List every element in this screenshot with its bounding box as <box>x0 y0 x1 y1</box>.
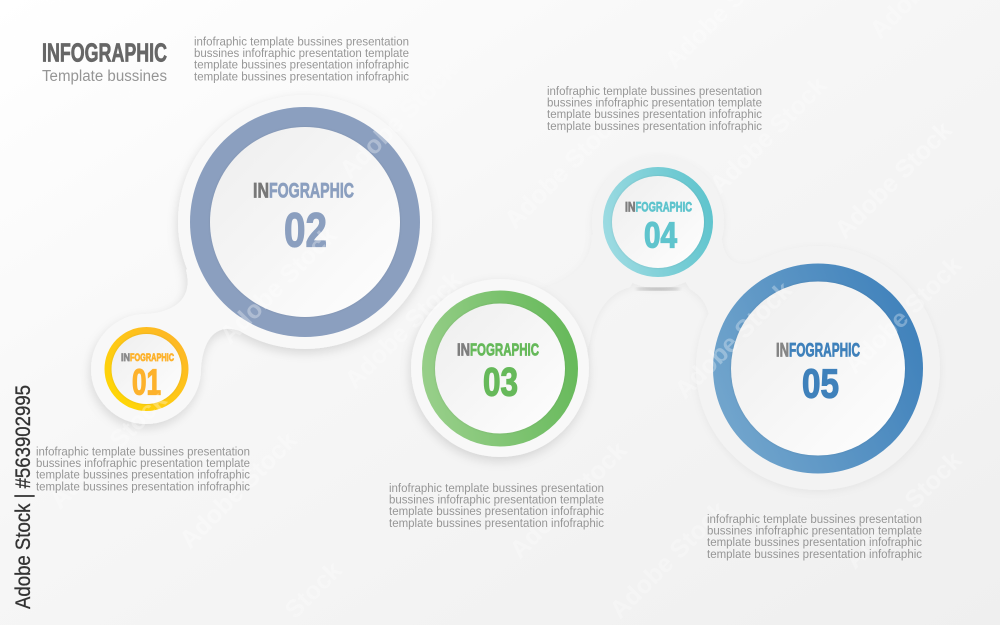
circle 02: IN <box>253 178 269 202</box>
watermark pattern: Adobe Stock <box>829 116 957 244</box>
title: INFOGRAPHIC <box>42 38 167 68</box>
text block: step 03: bussines infofraphic presentation template <box>389 493 604 507</box>
circle 02 <box>190 107 420 337</box>
circle 01: FOGRAPHIC <box>130 352 174 364</box>
circle 01: IN <box>121 352 130 364</box>
circle 02: 02 <box>284 204 327 258</box>
text block: top right: infofraphic template bussines presentation <box>547 84 762 98</box>
circle 03: FOGRAPHIC <box>470 340 539 360</box>
text block: top left: template bussines presentation infofraphic <box>194 58 409 72</box>
text block: step 03: template bussines presentation infofraphic <box>389 504 604 518</box>
text block: top left <box>194 34 409 83</box>
title <box>42 38 167 85</box>
text block: step 05: infofraphic template bussines presentation <box>707 512 922 526</box>
stock id vertical label: Adobe Stock | #563902995 <box>12 385 35 609</box>
watermark pattern: Adobe Stock <box>174 426 302 554</box>
text block: step 03: infofraphic template bussines presentation <box>389 481 604 495</box>
circle 05: 05 <box>802 360 839 406</box>
circle 03 <box>422 290 578 446</box>
contact shadow under circle 04 <box>636 288 680 290</box>
text block: top right: template bussines presentation infofraphic <box>547 119 762 133</box>
text block: step 01 <box>36 444 250 493</box>
watermark pattern: Adobe Stock <box>339 266 467 394</box>
watermark pattern: Adobe Stock <box>39 56 167 184</box>
watermark pattern: Adobe Stock <box>839 446 967 574</box>
text block: step 05: template bussines presentation infofraphic <box>707 535 922 549</box>
plate for circles 04 and 05 <box>500 156 940 490</box>
text block: top left: template bussines presentation infofraphic <box>194 69 409 83</box>
text block: top right: template bussines presentation infofraphic <box>547 107 762 121</box>
text block: step 01: infofraphic template bussines presentation <box>36 444 250 458</box>
circle 05 <box>713 264 923 474</box>
circle 05: FOGRAPHIC <box>789 340 860 362</box>
circle 01: 01 <box>132 362 161 402</box>
circle 01 <box>104 327 188 411</box>
circle 04: 04 <box>644 214 677 256</box>
watermark pattern: Adobe Stock <box>44 386 172 514</box>
watermark pattern: Adobe Stock <box>499 106 627 234</box>
title: Template bussines <box>42 68 167 85</box>
circle 02: FOGRAPHIC <box>269 178 354 202</box>
circle 03: 03 <box>483 360 518 404</box>
circle 04: IN <box>625 198 636 214</box>
watermark pattern: Adobe Stock <box>214 221 342 349</box>
circle 04 <box>603 167 713 277</box>
text block: step 05: template bussines presentation infofraphic <box>707 547 922 561</box>
watermark pattern: Adobe Stock <box>839 251 967 379</box>
text block: top right <box>547 84 762 133</box>
watermark pattern: Adobe Stock <box>504 436 632 564</box>
watermark pattern: Stock <box>279 556 347 624</box>
watermark pattern: Adobe Stock <box>604 496 732 624</box>
circle 04: FOGRAPHIC <box>636 198 692 214</box>
circle 03: IN <box>457 340 470 360</box>
watermark pattern: Adobe Stock <box>669 276 797 404</box>
text block: step 01: bussines infofraphic presentation template <box>36 456 250 470</box>
text block: top right: bussines infofraphic presentation template <box>547 96 762 110</box>
plate for circles 01, 02 and 03 <box>91 95 589 457</box>
watermark pattern: Adobe Stock <box>334 56 462 184</box>
text block: top left: bussines infofraphic presentation template <box>194 46 409 60</box>
text block: step 01: template bussines presentation infofraphic <box>36 479 250 493</box>
text block: step 03 <box>389 481 604 530</box>
text block: step 01: template bussines presentation infofraphic <box>36 468 250 482</box>
text block: step 05: bussines infofraphic presentation template <box>707 524 922 538</box>
text block: top left: infofraphic template bussines presentation <box>194 34 409 48</box>
text block: step 03: template bussines presentation infofraphic <box>389 516 604 530</box>
text block: step 05 <box>707 512 922 561</box>
watermark pattern: Adobe Stock <box>704 71 832 199</box>
circle 05: IN <box>776 340 789 362</box>
